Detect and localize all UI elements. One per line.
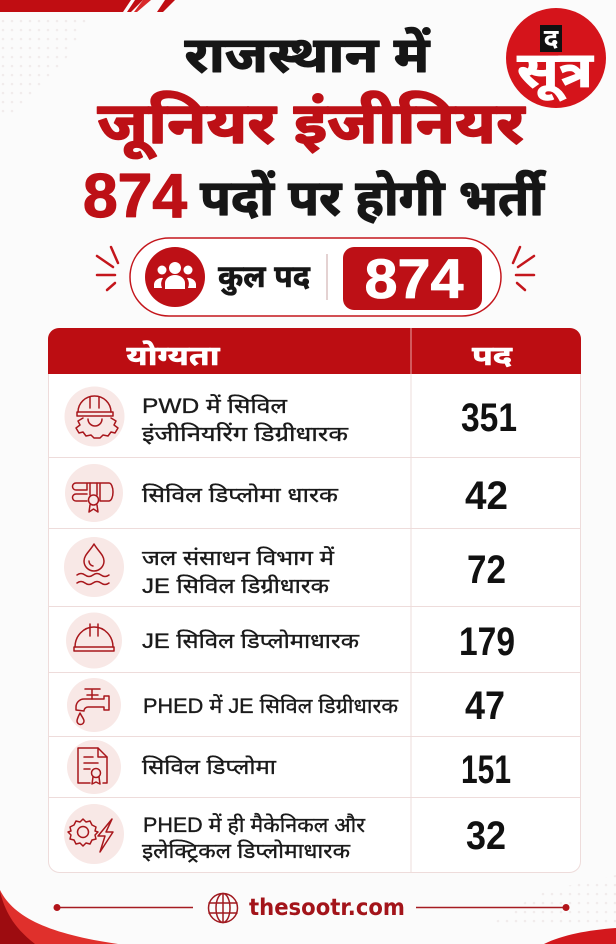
qualification: सिविल डिप्लोमा धारक [142,483,339,507]
icon: globe [208,894,238,922]
qualification: PHED में JE सिविल डिग्रीधारक [143,694,399,718]
row 1 [64,386,517,446]
posts: 72 [467,548,506,592]
label: total posts: कुल पद [218,259,311,296]
decoration: top-left red band [0,0,175,12]
qualification: जल संसाधन विभाग में [142,546,335,570]
icon: people [145,247,205,307]
posts: 47 [465,684,505,728]
decoration: bottom-right red wave [544,928,616,944]
qualification: JE सिविल डिप्लोमाधारक [142,629,360,653]
icon: water drop [64,537,124,597]
row 6 [67,740,511,794]
title line 3: पदों पर होगी भर्ती [200,170,546,226]
qualification: JE सिविल डिग्रीधारक [142,574,330,598]
title line 3: 874 [83,162,188,231]
table [48,328,581,873]
value: 874: 874 [364,247,464,310]
icon: certificate [67,740,121,794]
qualification: PHED में ही मैकेनिकल और [143,812,365,837]
decoration: right burst [513,247,534,290]
posts: 351 [461,396,517,440]
logo: the sootr: द [544,23,559,53]
table header [48,328,581,374]
qualification: PWD में सिविल [142,394,288,418]
decoration: left burst [97,247,118,290]
posts: 151 [461,748,511,792]
icon: helmet and gear [64,386,124,446]
qualification: इंजीनियरिंग डिग्रीधारक [142,422,349,446]
row 3 [64,537,506,598]
table header: पद [472,341,513,371]
row 2 [65,464,508,522]
posts: 179 [459,620,515,664]
qualification: इलेक्ट्रिकल डिप्लोमाधारक [142,839,351,863]
row 7 [64,804,506,864]
qualification: सिविल डिप्लोमा [142,755,277,779]
posts: 32 [466,814,506,858]
row 4 [66,612,515,668]
icon: diploma scroll [65,464,123,522]
logo: the sootr: सूत्र [517,42,594,102]
table header: योग्यता [126,341,221,371]
website: thesootr.com [249,895,405,921]
title line 2: जूनियर इंजीनियर [98,91,526,160]
title line 3 [83,162,546,231]
footer [54,894,570,922]
title line 1: राजस्थान में [184,27,431,83]
icon: hard hat [66,612,122,668]
posts: 42 [465,474,508,518]
total posts pill [130,238,501,316]
value: 874 [343,247,482,310]
row 5 [67,678,505,732]
decoration: bottom-left red wave [0,890,118,944]
icon: water tap [67,678,121,732]
logo: the sootr [506,8,606,108]
icon: gear and lightning [64,804,124,864]
